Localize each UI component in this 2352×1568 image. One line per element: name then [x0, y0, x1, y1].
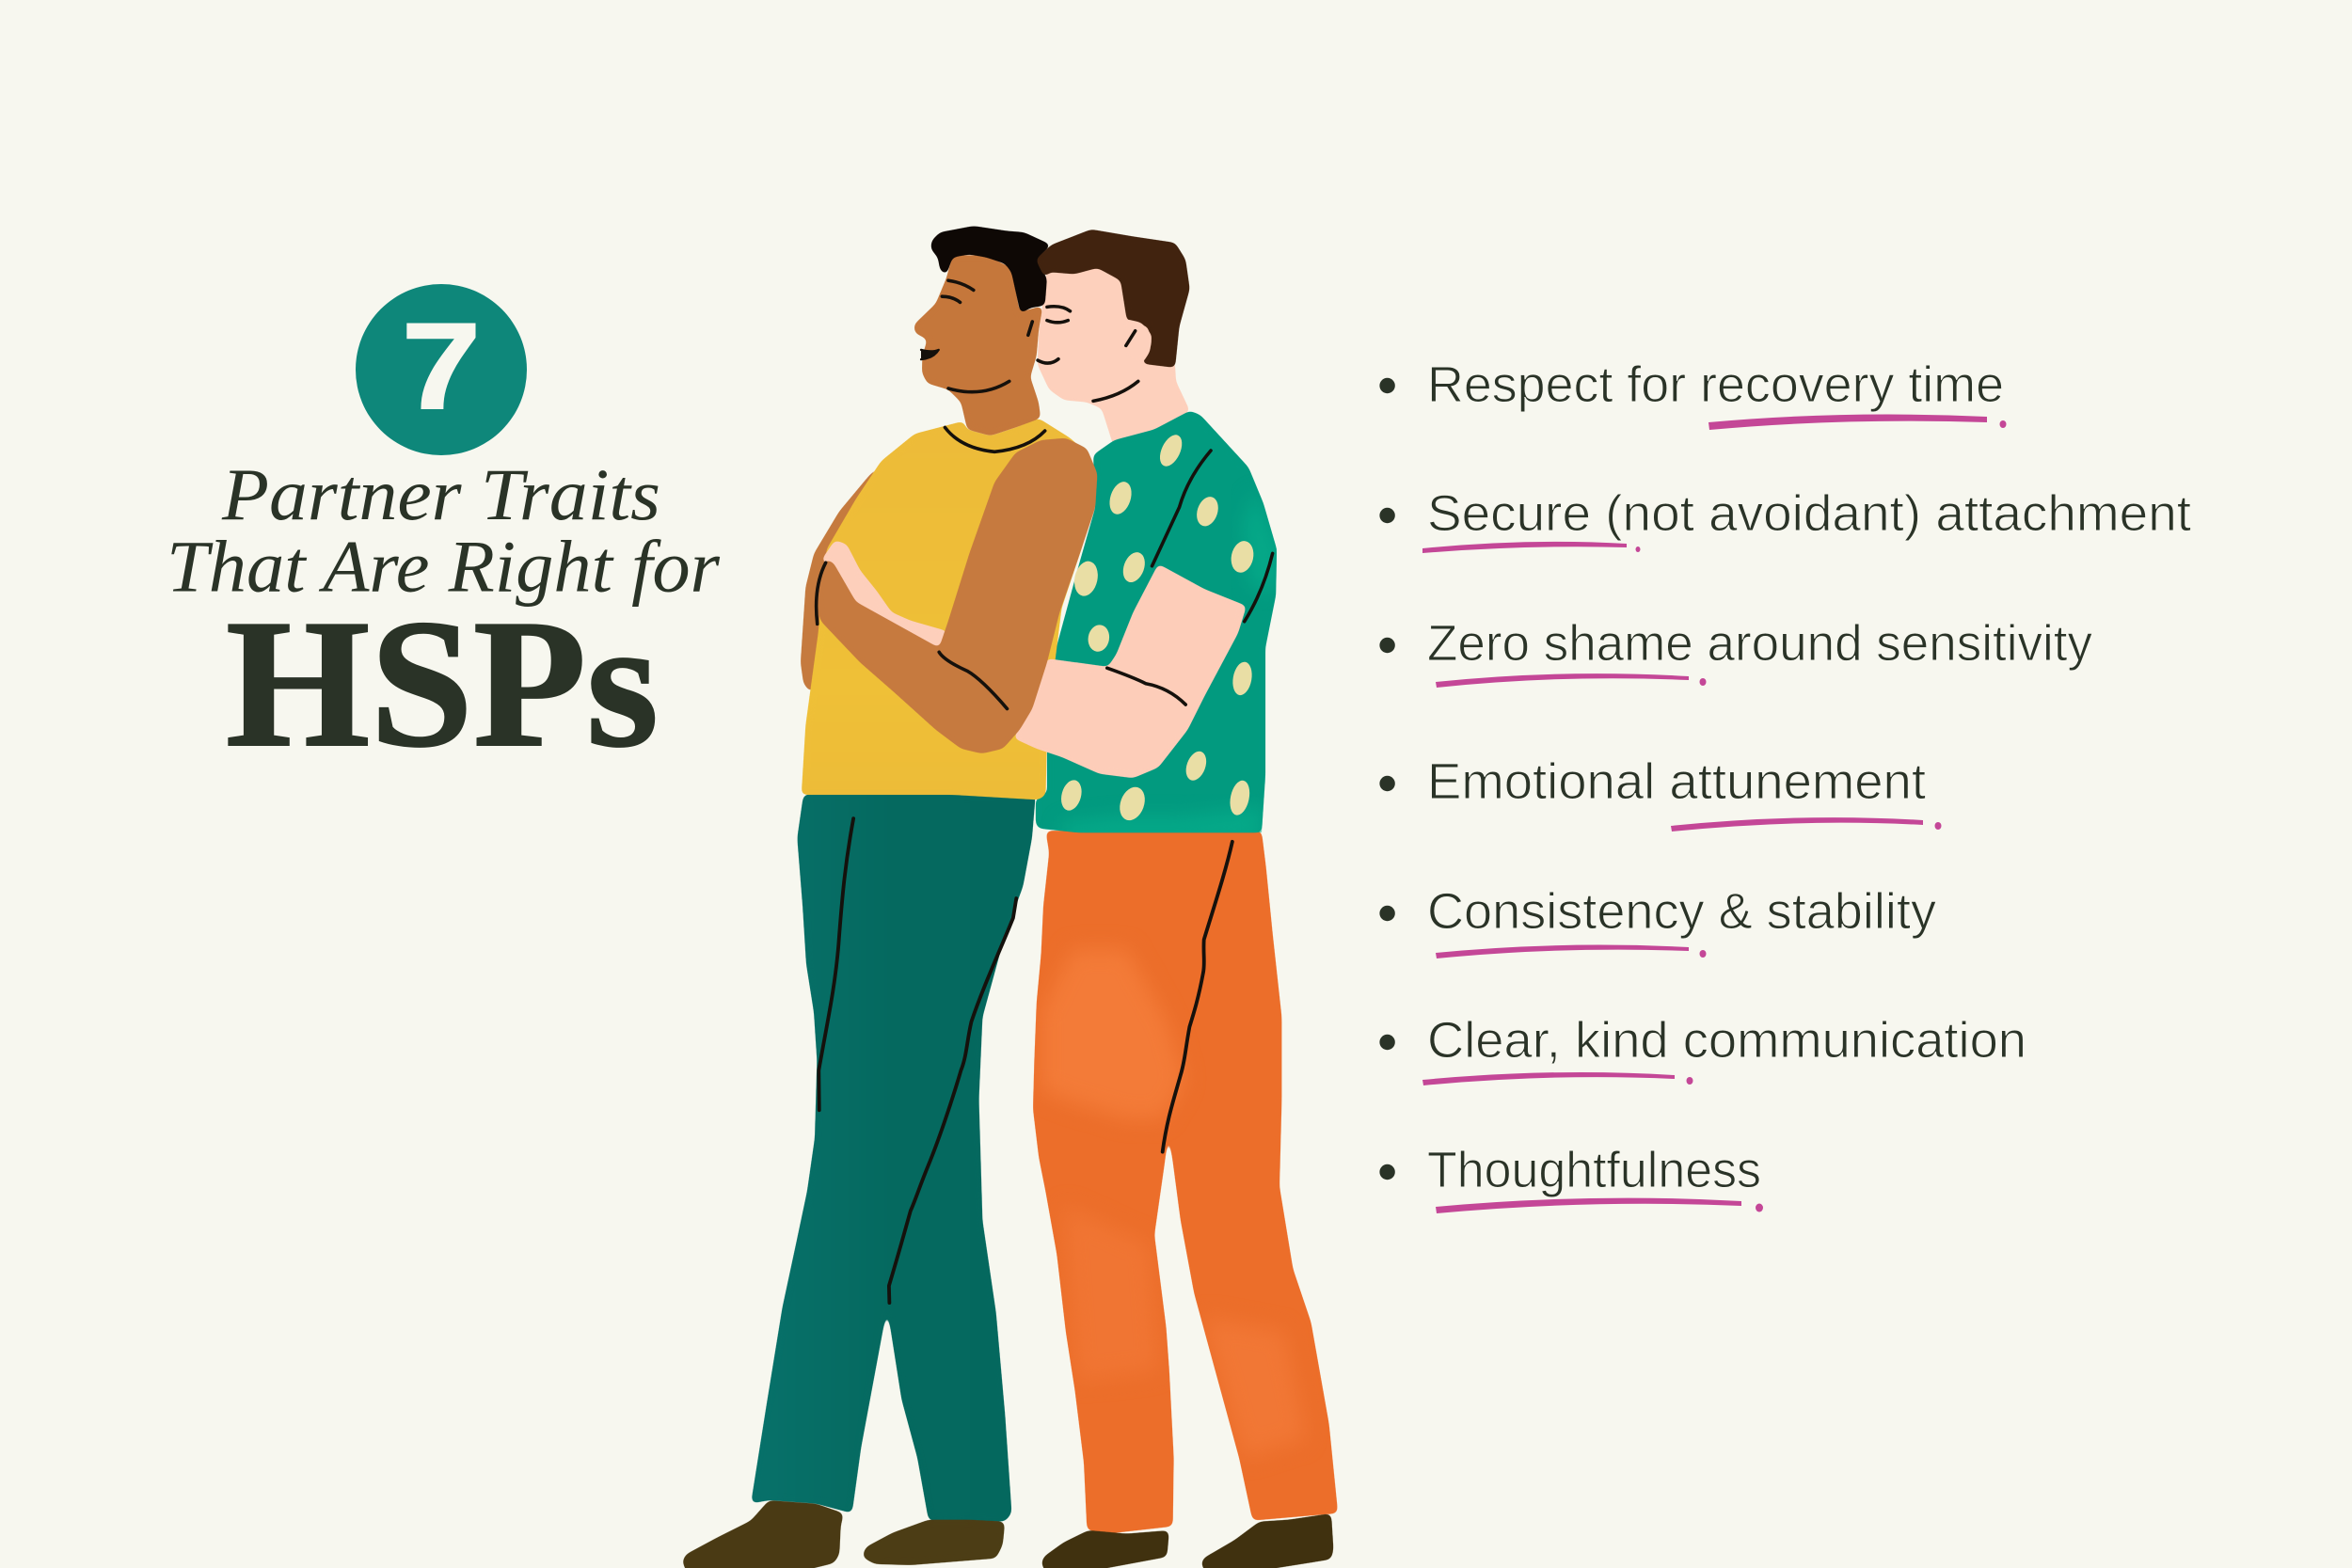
left man head and neck [914, 255, 1042, 436]
heading HSPs: HSPs [226, 582, 659, 785]
left man hair [930, 226, 1051, 314]
item: respect for recovery time: Respect for recovery time [1427, 356, 2004, 413]
teal trousers [751, 795, 1036, 1522]
face and body ink lines [817, 280, 1273, 709]
green patterned shirt [1036, 411, 1280, 843]
number badge: 7 [402, 297, 481, 435]
item: thoughtfulness [1379, 1142, 1763, 1213]
item: thoughtfulness: Thoughtfulness [1427, 1142, 1761, 1198]
left man far arm [801, 461, 882, 694]
legs and shoes [682, 795, 1338, 1568]
number badge [356, 284, 527, 455]
item: zero shame: Zero shame around sensitivity [1427, 615, 2092, 672]
right man face and neck [1038, 268, 1190, 449]
infographic canvas [171, 226, 2190, 1568]
yellow shirt [802, 419, 1095, 800]
item: consistency and stability: Consistency & stability [1427, 883, 1936, 940]
item: clear kind communication: Clear, kind communication [1427, 1012, 2026, 1069]
heading line 1: Partner Traits [221, 453, 660, 535]
trouser crease lines [818, 818, 1232, 1303]
right man ear [1122, 318, 1152, 364]
shirt polka dots [1058, 432, 1256, 824]
right man hand [821, 540, 947, 652]
right man hair [1036, 230, 1190, 368]
item: emotional attunement: Emotional attunement [1427, 753, 1926, 810]
left man folded arm [816, 438, 1097, 753]
item: consistency and stability [1379, 883, 1936, 958]
shoes [682, 1500, 1333, 1568]
orange trousers [1033, 831, 1338, 1534]
item: secure attachment: Secure (not avoidant) attachment [1427, 485, 2191, 542]
item: emotional attunement [1379, 753, 1942, 832]
right man arm [1013, 564, 1247, 778]
heading line 2: That Are Right for [167, 525, 721, 608]
title block [167, 284, 721, 785]
trait list [1379, 356, 2191, 1213]
illustration: embracing couple [682, 226, 1338, 1568]
upper bodies [801, 226, 1280, 843]
